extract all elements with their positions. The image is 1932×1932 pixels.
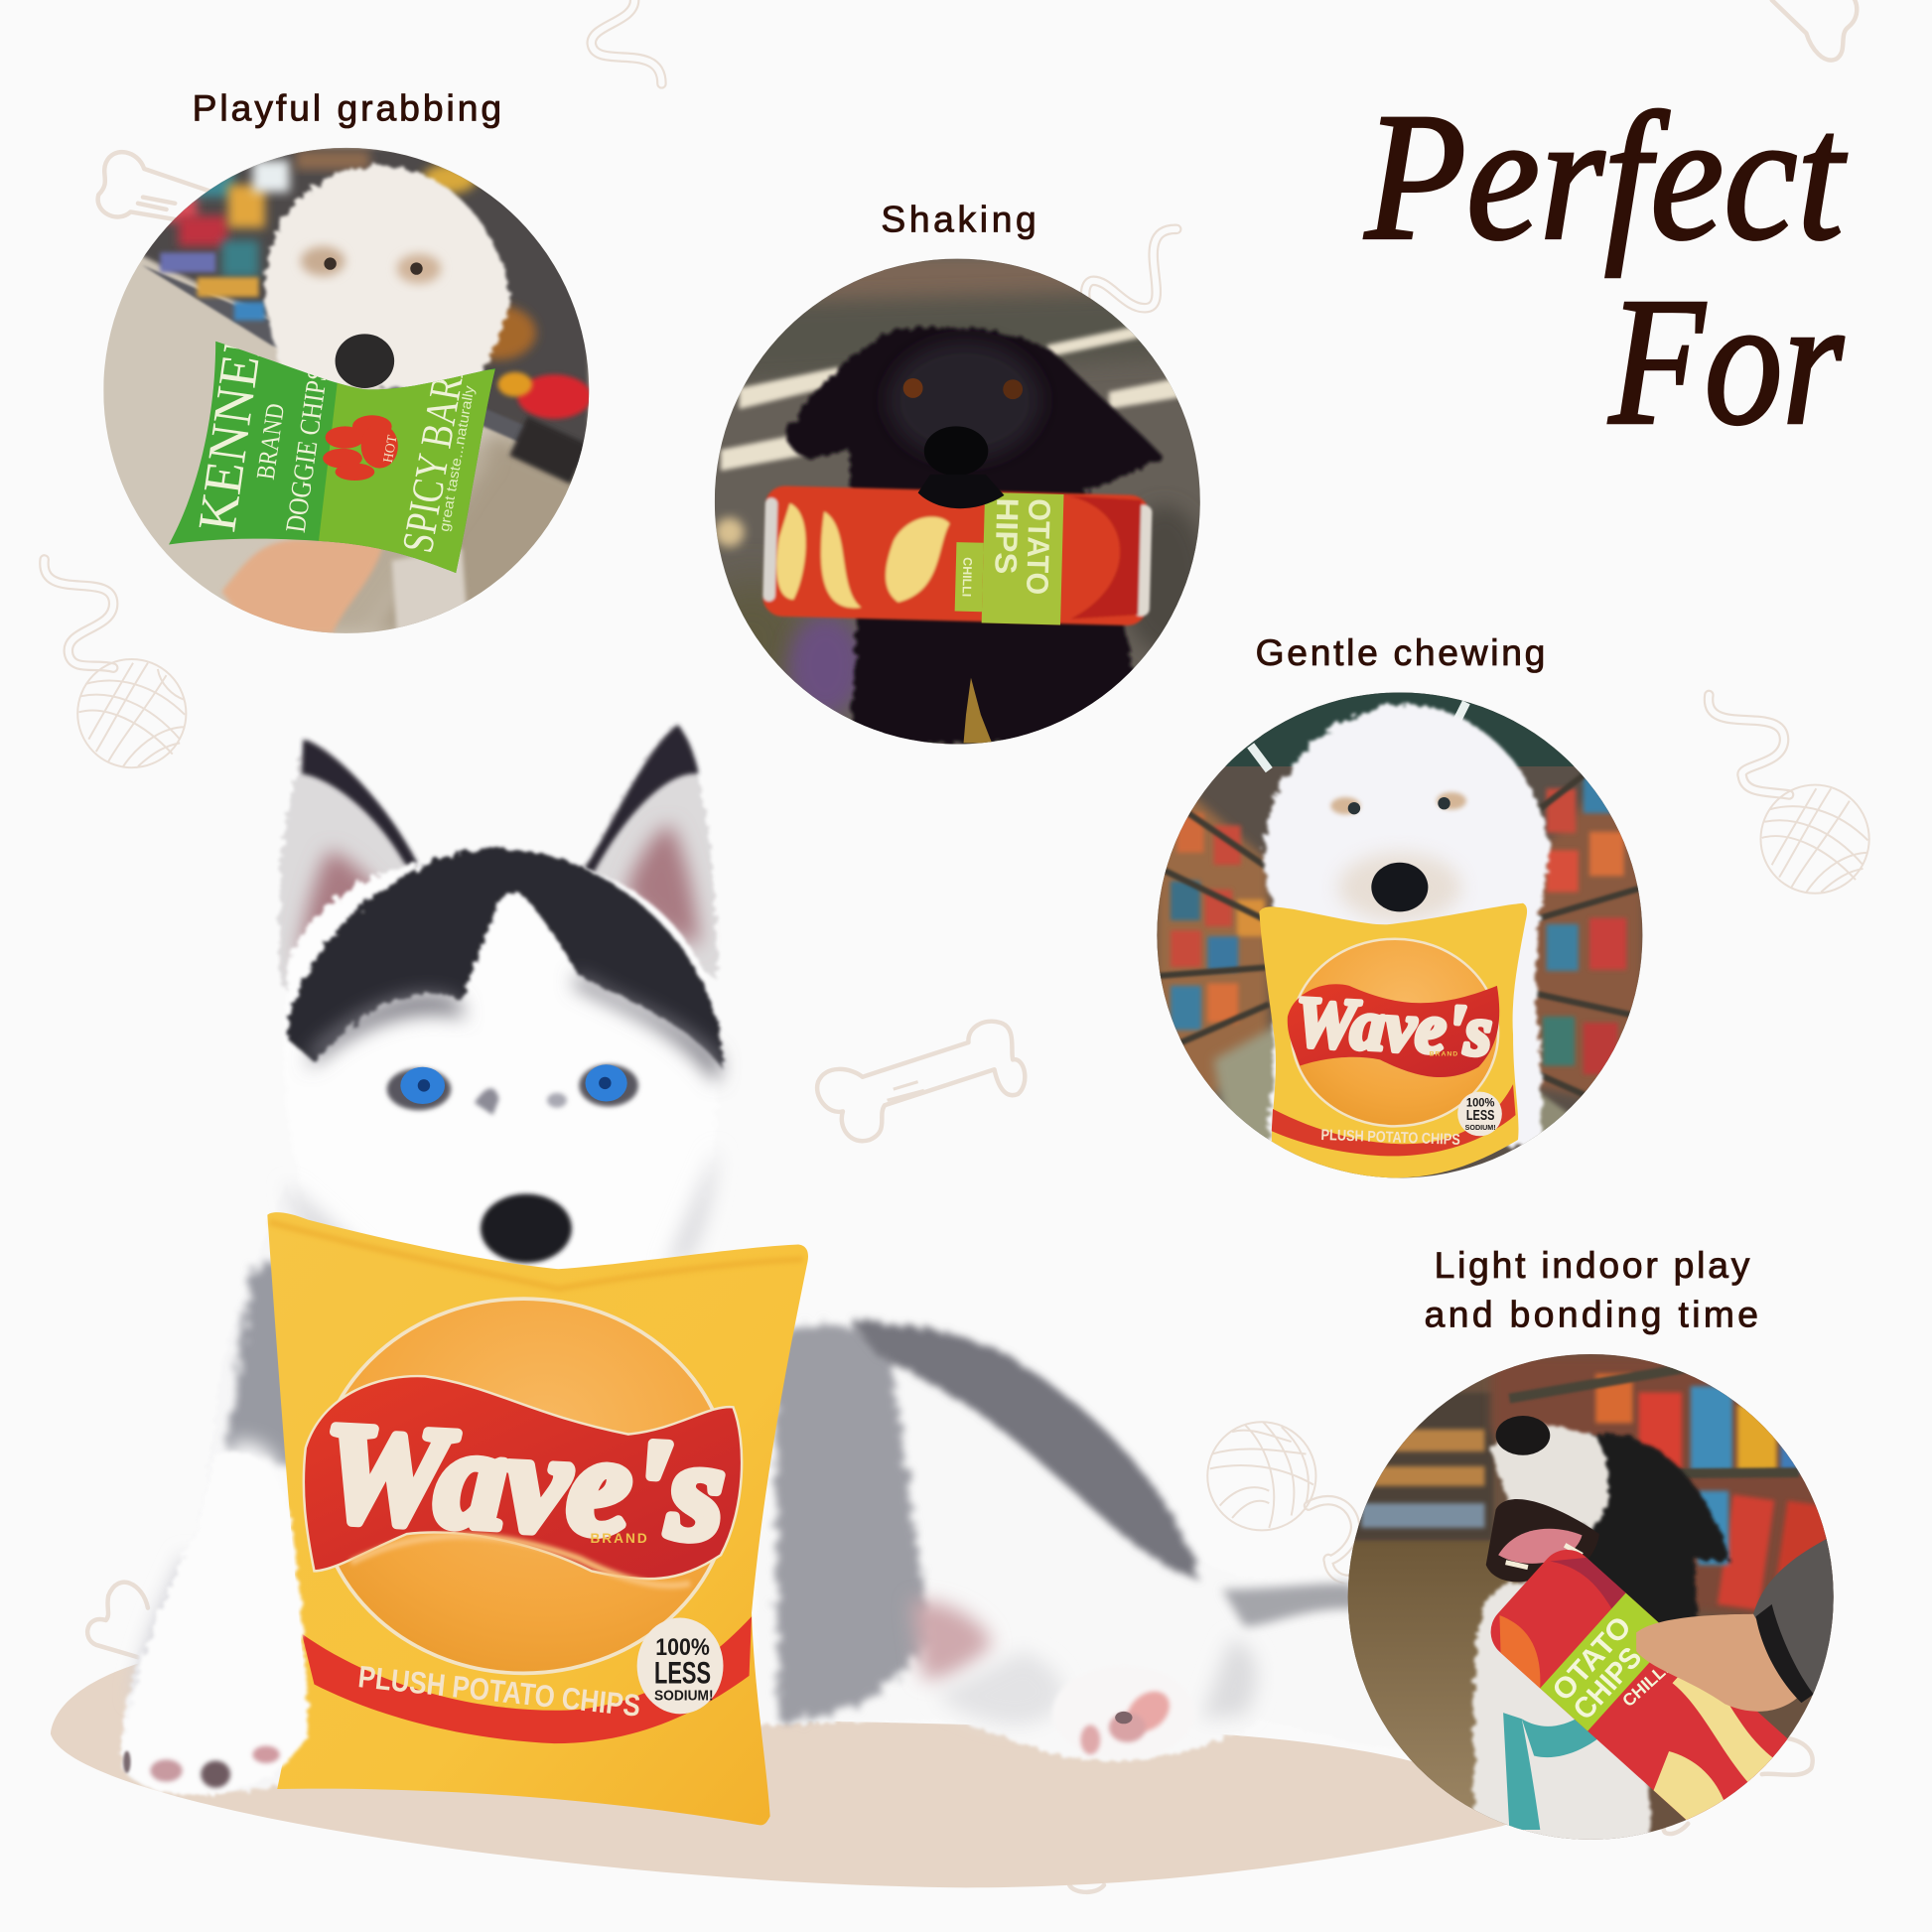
green kennel bag (169, 342, 495, 574)
plush chip bag: Wave's (1293, 982, 1494, 1071)
plush chip bag: SODIUM! (1465, 1123, 1496, 1132)
sodium badge: LESS (654, 1655, 711, 1690)
floor ellipse (51, 1657, 1518, 1887)
harness (1503, 1694, 1614, 1830)
chip can: OTATO (1020, 498, 1057, 596)
left ear (279, 740, 426, 1001)
dog mouth over can (918, 475, 1004, 508)
squiggle top (592, 0, 661, 83)
white dog (1263, 705, 1550, 1146)
green kennel bag: DOGGIE CHIPS (281, 365, 335, 534)
sodium badge (637, 1618, 724, 1714)
green kennel bag: SPICY BARK (392, 347, 477, 556)
grey back patch (850, 1320, 1197, 1580)
photo circle: light indoor play (1345, 1353, 1836, 1850)
label: playful grabbing: Playful grabbing (193, 87, 501, 129)
plush potato chips text: PLUSH POTATO CHIPS (356, 1659, 642, 1724)
bone lower left (87, 1583, 148, 1657)
sodium badge: SODIUM! (654, 1689, 714, 1705)
yarn and squiggle near fourth photo (1207, 1422, 1355, 1580)
lower red band (302, 1616, 752, 1743)
green kennel bag: great taste...naturally (437, 383, 479, 533)
nose (481, 1194, 572, 1263)
plush chip bag: BRAND (1430, 1051, 1458, 1058)
store background (696, 259, 1207, 715)
plush chip bag: 100% (1466, 1096, 1495, 1109)
hand (221, 540, 384, 633)
blue eyes (400, 1067, 445, 1104)
label: shaking: Shaking (881, 198, 1036, 239)
store shelves (103, 148, 592, 633)
hot paw: HOT (380, 433, 400, 464)
bone top right (1772, 0, 1857, 61)
chip can (762, 485, 1153, 627)
CHILLI label: CHILLI (1618, 1659, 1673, 1711)
plush chip bag: PLUSH POTATO CHIPS (1320, 1127, 1460, 1149)
photo circle: shaking (696, 259, 1207, 745)
chip can: OTATO (1546, 1610, 1638, 1708)
title: For (1608, 260, 1845, 463)
hot paw (323, 415, 400, 481)
chip ripple (351, 1536, 690, 1586)
husky rear body (752, 1320, 1417, 1759)
front paw (122, 1451, 308, 1794)
Wave's logo: Wave's (319, 1393, 728, 1570)
hand and sleeve (1636, 1534, 1836, 1712)
squiggle near shaking (1085, 229, 1176, 308)
sodium badge: 100% (655, 1634, 710, 1660)
plush chip bag: LESS (1466, 1108, 1494, 1124)
brand: BRAND (590, 1531, 649, 1546)
husky puppy with plush chip bag (122, 725, 1417, 1825)
eye shading (387, 1068, 451, 1110)
grey left flank (773, 1324, 934, 1723)
aisle shelves (1156, 692, 1644, 1171)
bone bottom right (1664, 1737, 1813, 1834)
plush chip bag (1259, 903, 1527, 1177)
husky left shoulder and foreleg (122, 1182, 310, 1794)
white dog (265, 167, 510, 633)
green kennel bag: BRAND (251, 402, 290, 482)
chip can: CHIPS (1567, 1641, 1648, 1726)
black dog (786, 327, 1165, 743)
bone bottom (1069, 1885, 1104, 1892)
title (1364, 75, 1847, 463)
chip can: CHILLI (959, 557, 975, 597)
right ear (579, 725, 717, 980)
label: gentle chewing: Gentle chewing (1256, 631, 1545, 673)
chip (317, 1299, 731, 1673)
photo circle: playful grabbing (103, 148, 592, 633)
red wave band (304, 1376, 742, 1579)
green kennel bag: KENNEL (186, 320, 275, 535)
bone top left (98, 152, 209, 224)
chip can: HIPS (988, 497, 1025, 575)
plush chip bag (267, 1212, 808, 1825)
photo circle: gentle chewing (1156, 692, 1644, 1180)
chip can (1479, 1539, 1805, 1850)
border collie (1472, 1416, 1731, 1849)
husky head (284, 848, 724, 1294)
label: light indoor play and bonding time (1425, 1244, 1758, 1335)
hind paw (1052, 1666, 1195, 1759)
label: light indoor play and bonding time: and bonding time (1425, 1294, 1758, 1335)
squiggle and yarn right (1709, 695, 1869, 894)
squiggle and yarn left (44, 559, 186, 767)
store shelves (1345, 1355, 1836, 1849)
title: Perfect (1364, 75, 1847, 278)
bag body (267, 1212, 808, 1825)
black mask (286, 848, 724, 1069)
bone centre (817, 1022, 1025, 1141)
open mouth (1486, 1499, 1599, 1582)
label: light indoor play and bonding time: Light indoor play (1435, 1244, 1750, 1286)
